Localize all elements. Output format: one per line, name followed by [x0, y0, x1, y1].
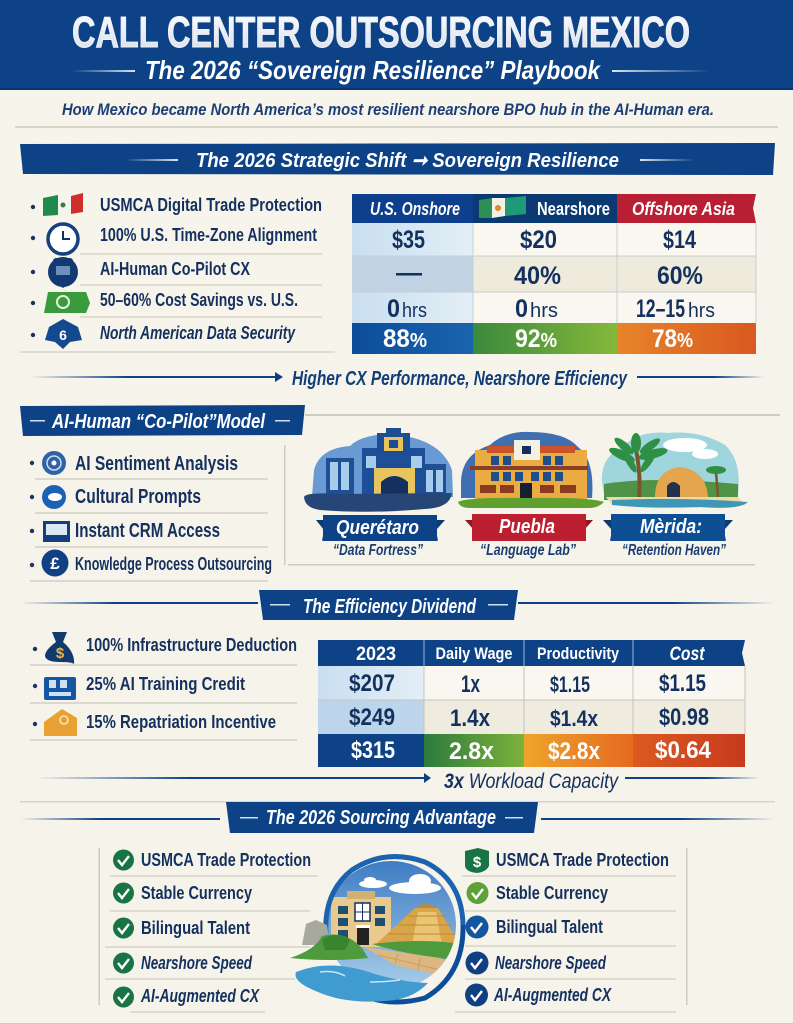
table rate row: $14: [663, 226, 696, 254]
row 1: [349, 670, 706, 698]
icon: dollar shield: $: [473, 854, 482, 871]
list: right advantages: Stable Currency: [496, 883, 608, 903]
table header: Cost: [670, 644, 705, 665]
table hours row: hrs: [530, 300, 558, 322]
section banner: efficiency dividend: [259, 590, 518, 620]
arrow: workload capacity: 3x Workload Capacity: [444, 770, 619, 793]
illustration: language lab: [458, 432, 604, 508]
list: left advantages: [105, 850, 318, 1012]
arrow: higher CX performance: [30, 368, 765, 390]
list: strategic benefits: 50–60% Cost Savings vs. U.S.: [100, 290, 298, 310]
row 1: $207: [349, 670, 395, 697]
table header: Nearshore: [537, 199, 610, 219]
icon: Mexican flag: [43, 193, 83, 216]
table share row: 40%: [514, 262, 561, 290]
icon: money bag: $: [56, 645, 65, 662]
arrow: workload capacity: [35, 770, 760, 793]
table CX score row: 78%: [652, 325, 693, 353]
icon: clock: [48, 224, 78, 254]
row 2: $1.4x: [550, 706, 599, 731]
icon: sentiment analysis: [42, 451, 66, 475]
table hours row: 0: [515, 295, 528, 323]
icon: co-pilot headset: [48, 257, 78, 288]
ribbon: Mèrida:: [640, 516, 702, 538]
list: incentives: 15% Repatriation Incentive: [86, 712, 276, 732]
comparison table: [352, 194, 756, 354]
section banner: co-pilot model: AI-Human “Co-Pilot”Model: [51, 411, 265, 433]
table rate row: $20: [520, 226, 557, 254]
tagline: How Mexico became North America’s most resilient nearshore BPO hub in the AI-Human era.: [62, 100, 714, 119]
table header: Offshore Asia: [632, 199, 735, 219]
table hours row: hrs: [402, 300, 427, 322]
arrow: higher CX performance: Higher CX Performance, Nearshore Efficiency: [292, 368, 628, 390]
row 3 highlighted: $315: [351, 737, 395, 764]
icon: security shield: 6: [59, 327, 67, 343]
list text: 100% Infrastructure Deduction: [86, 635, 297, 655]
table rate row: [392, 226, 696, 254]
list: co-pilot features: Instant CRM Access: [75, 520, 220, 542]
list text: USMCA Trade Protection: [496, 850, 669, 870]
list: strategic benefits: [20, 193, 335, 352]
row 3 highlighted: [318, 734, 745, 767]
icon: repatriation: [44, 709, 77, 736]
ribbon: [603, 514, 733, 541]
caption: “Language Lab”: [480, 542, 576, 559]
list: co-pilot features: [30, 451, 272, 581]
subtitle: The 2026 “Sovereign Resilience” Playbook: [145, 55, 601, 85]
list: right advantages: [455, 848, 676, 1012]
row 3 highlighted: 2.8x: [449, 738, 495, 765]
icon: training building: [44, 677, 76, 700]
caption: “Retention Haven”: [622, 542, 726, 559]
table share row: 60%: [657, 262, 703, 290]
list: left advantages: Stable Currency: [141, 883, 252, 903]
illustration: retention haven: [602, 432, 748, 508]
list text: USMCA Trade Protection: [141, 850, 311, 870]
table header: Daily Wage: [436, 644, 512, 663]
table header: [318, 640, 745, 666]
list: strategic benefits: North American Data Security: [100, 323, 296, 343]
table CX score row: 88%: [383, 325, 427, 353]
caption: “Data Fortress”: [333, 542, 423, 559]
list: left advantages: AI-Augmented CX: [140, 986, 260, 1006]
section banner: sourcing advantage: The 2026 Sourcing Advantage: [266, 807, 496, 829]
list: co-pilot features: Cultural Prompts: [75, 486, 201, 508]
wage table: [318, 640, 745, 767]
row 2: $249: [349, 704, 395, 731]
table header: Productivity: [537, 644, 619, 663]
illustration: data fortress: [304, 428, 453, 512]
list: left advantages: Bilingual Talent: [141, 918, 250, 938]
list: left advantages: Nearshore Speed: [141, 953, 253, 973]
row 1: 1x: [461, 671, 480, 698]
icon: money bag: [45, 632, 74, 664]
list: right advantages: Bilingual Talent: [496, 917, 603, 937]
icon: knowledge: £: [50, 554, 60, 573]
table hours row: [387, 295, 715, 323]
row 2: 1.4x: [450, 705, 491, 732]
section banner: sourcing advantage: [226, 802, 538, 833]
list: strategic benefits: 100% U.S. Time-Zone Alignment: [100, 225, 317, 245]
row 1: $1.15: [550, 672, 590, 697]
section banner: strategic shift: The 2026 Strategic Shift ➞ Sovereign Resilience: [196, 150, 619, 172]
row 2: [349, 704, 709, 732]
list: co-pilot features: Knowledge Process Outsourcing: [75, 554, 272, 574]
check icons: [465, 882, 488, 1006]
list: strategic benefits: AI-Human Co-Pilot CX: [100, 259, 250, 279]
list: incentives: 25% AI Training Credit: [86, 674, 245, 694]
icon: knowledge: [42, 550, 68, 576]
city card: Merida: [602, 432, 748, 559]
section banner: strategic shift: [20, 143, 775, 175]
icon: flag in header: [479, 196, 526, 218]
header band: [0, 0, 793, 90]
check icons: [113, 850, 134, 1008]
section banner: co-pilot model: [20, 405, 305, 436]
section banner: efficiency dividend: The Efficiency Dividend: [303, 596, 477, 618]
row 2: $0.98: [659, 704, 709, 731]
list: right advantages: Nearshore Speed: [495, 953, 607, 973]
row 3 highlighted: $0.64: [655, 737, 712, 764]
table hours row: 0: [387, 295, 400, 323]
icon: cultural prompts: [42, 485, 66, 509]
list text: USMCA Digital Trade Protection: [100, 195, 322, 215]
table CX score row: [352, 323, 756, 354]
city card: Queretaro: [304, 428, 453, 559]
ribbon: Puebla: [499, 516, 555, 538]
list: incentives: [30, 632, 297, 740]
list text: AI Sentiment Analysis: [75, 453, 238, 475]
emblem: Mexico landscape: [290, 857, 463, 1002]
table hours row: 12–15: [636, 295, 685, 323]
row 1: $1.15: [659, 670, 706, 697]
icon: security shield: [45, 319, 82, 349]
icon: money: [44, 292, 90, 313]
table header: 2023: [356, 644, 396, 665]
city card: Puebla: [458, 432, 604, 559]
icon: dollar shield: [465, 848, 489, 873]
ribbon: Querétaro: [336, 517, 419, 539]
table rate row: $35: [392, 226, 425, 254]
table CX score row: 92%: [515, 325, 557, 353]
ribbon: [316, 515, 445, 541]
list: right advantages: AI-Augmented CX: [493, 985, 612, 1005]
icon: CRM screen: [43, 521, 70, 542]
row 3 highlighted: $2.8x: [548, 738, 601, 765]
table header: U.S. Onshore: [370, 199, 460, 219]
table header: [352, 194, 756, 223]
table hours row: hrs: [688, 300, 715, 322]
table share row: [396, 262, 703, 290]
ribbon: [465, 514, 593, 541]
